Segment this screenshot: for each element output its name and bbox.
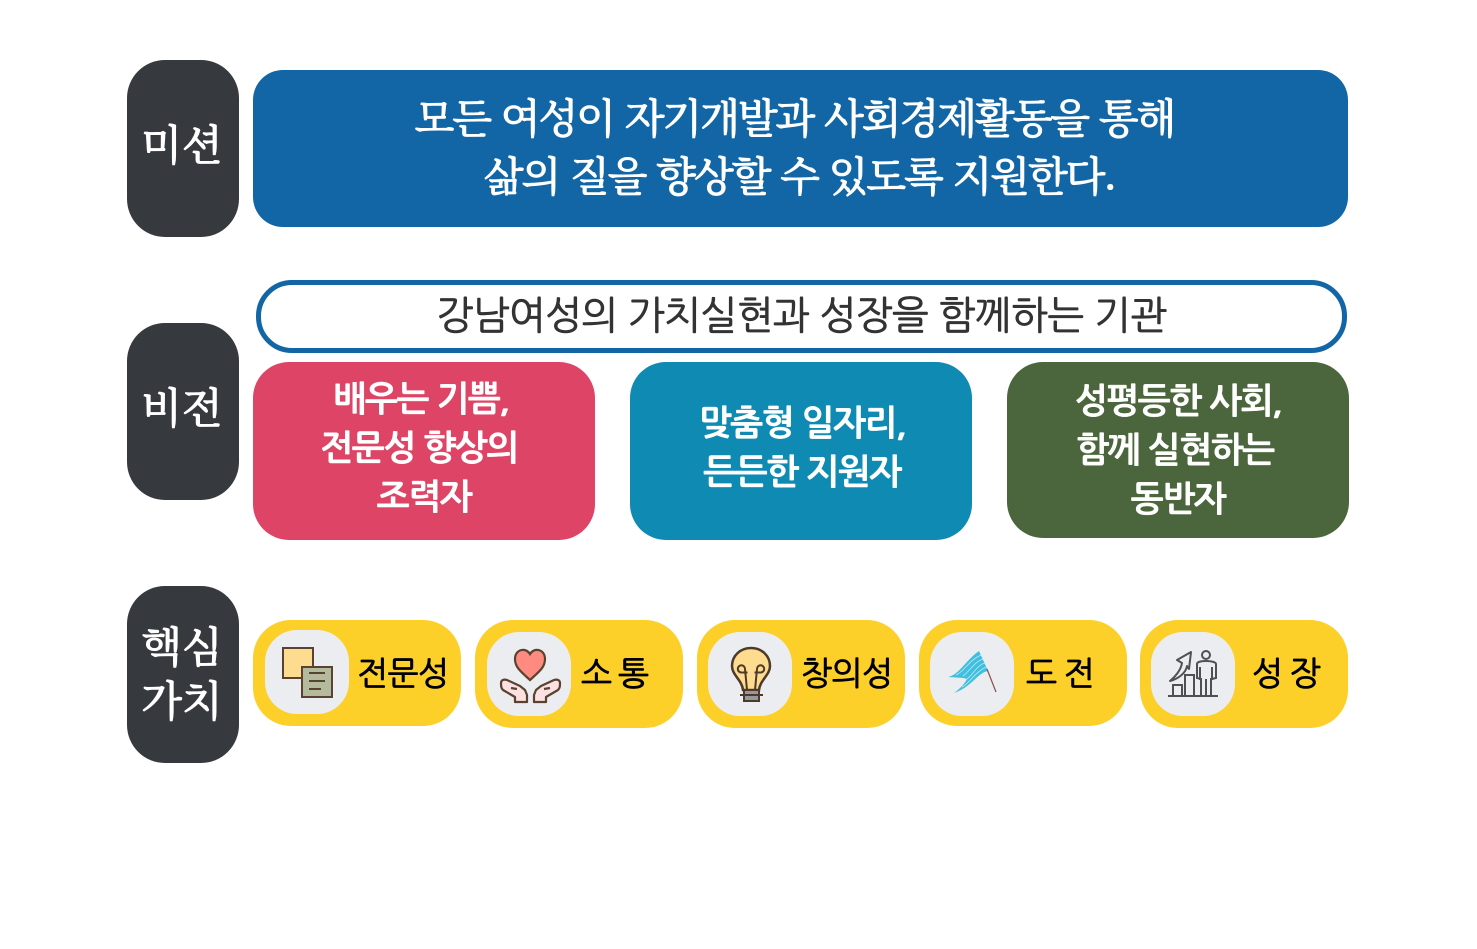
challenge text: 도 전 <box>1026 657 1093 690</box>
card text: 든든한 지원자 <box>703 456 901 490</box>
card text <box>320 381 518 515</box>
label: core values: 가치 <box>141 669 223 729</box>
label: vision <box>127 323 239 500</box>
card text: 조력자 <box>377 481 471 515</box>
creativity text: 창의성 <box>801 657 893 690</box>
mission text <box>415 86 1174 203</box>
card text: 성평등한 사회, <box>1075 385 1281 419</box>
panel: mission statement <box>253 70 1348 227</box>
card: gender equal society <box>1007 362 1349 538</box>
communication text: 소 통 <box>581 657 647 690</box>
pill: challenge <box>919 620 1127 726</box>
vision text: 강남여성의 가치실현과 성장을 함께하는 기관 <box>437 296 1166 335</box>
card text: 전문성 향상의 <box>320 432 518 466</box>
expertise text: 전문성 <box>357 657 449 690</box>
card: tailored jobs <box>630 362 972 540</box>
icon: flag <box>930 632 1014 716</box>
pill: communication <box>475 620 683 728</box>
card text <box>1075 383 1281 517</box>
icon: growth chart and person <box>1151 632 1235 716</box>
label: mission: 미션 <box>141 113 223 173</box>
label: mission <box>127 60 239 237</box>
pill: expertise <box>253 620 461 726</box>
icon: documents <box>265 630 349 714</box>
pill: creativity <box>697 620 905 728</box>
card text: 맞춤형 일자리, <box>699 407 905 441</box>
label: vision: 비전 <box>141 376 223 436</box>
icon: light bulb <box>708 632 792 716</box>
label: core values <box>127 586 239 763</box>
mission text: 삶의 질을 향상할 수 있도록 지원한다. <box>484 144 1115 203</box>
card text: 배우는 기쁨, <box>333 383 509 417</box>
label: core values: 핵심 <box>141 615 223 675</box>
icon: heart and hands <box>487 632 571 716</box>
card text <box>699 405 905 490</box>
pill: growth <box>1140 620 1348 728</box>
card text: 동반자 <box>1131 483 1225 517</box>
panel: vision statement <box>256 280 1347 353</box>
growth text: 성 장 <box>1252 657 1319 690</box>
card text: 함께 실현하는 <box>1076 434 1274 468</box>
card: joy of learning <box>253 362 595 540</box>
mission text: 모든 여성이 자기개발과 사회경제활동을 통해 <box>415 86 1174 145</box>
